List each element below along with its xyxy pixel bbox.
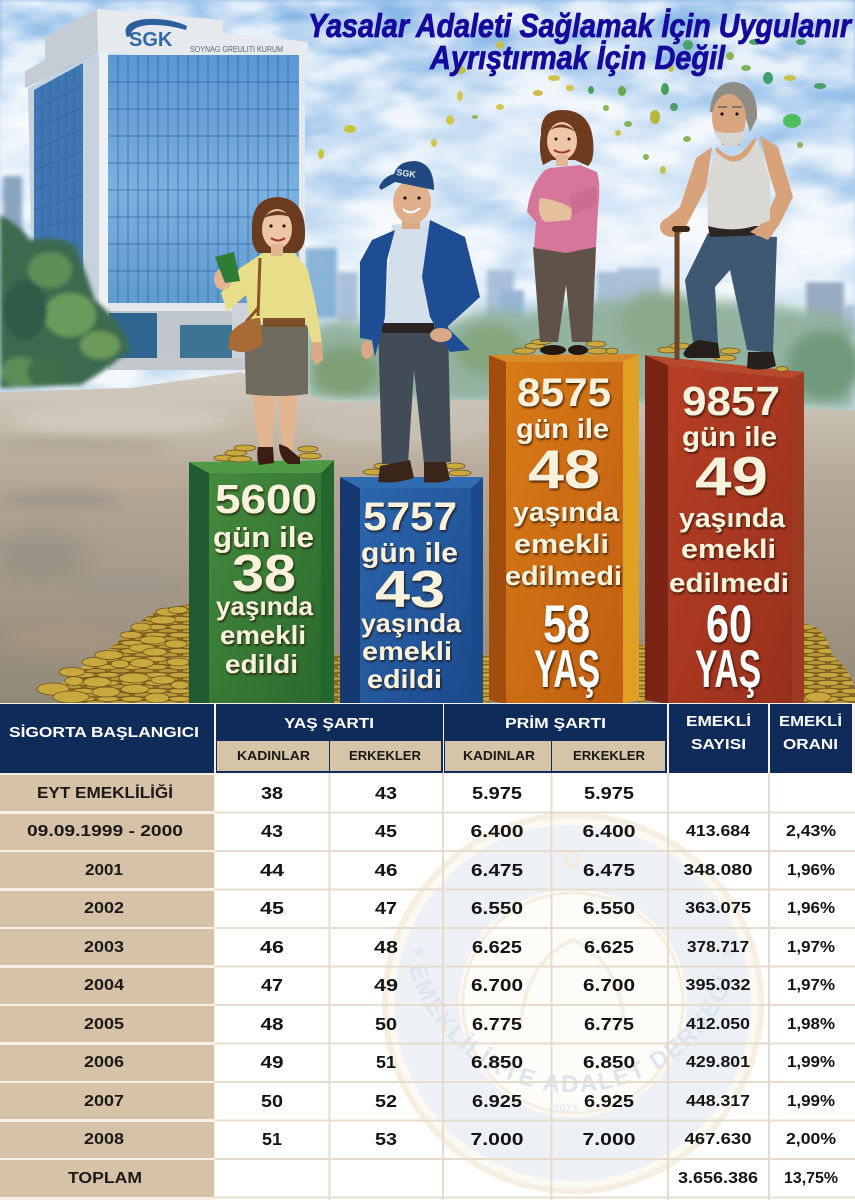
sub-headers: kadınlar and erkekler: ERKEKLER bbox=[573, 749, 645, 763]
table row: 2006: 2006 bbox=[84, 1054, 124, 1071]
figure: woman in yellow blouse bbox=[214, 197, 323, 465]
watermark: association logo: D bbox=[563, 844, 582, 874]
pedestal text: 5757 bbox=[361, 495, 462, 694]
header: emekli sayısı: EMEKLİ bbox=[686, 713, 751, 730]
pedestal text: 5600: yaşında bbox=[216, 591, 314, 621]
table row: 2001: 46 bbox=[374, 860, 398, 880]
table row: 2003: 48 bbox=[374, 937, 398, 957]
table row: 2002: 363.075 bbox=[685, 900, 751, 917]
table row: 2003: 2003 bbox=[84, 939, 124, 956]
table row: 2003: 6.625 bbox=[472, 937, 522, 957]
table row: 2001: 2001 bbox=[85, 862, 123, 879]
table row: 2000: 6.400 bbox=[582, 821, 636, 841]
table row: 2003: 1,97% bbox=[787, 939, 835, 956]
table row: 2000 bbox=[27, 821, 836, 841]
pedestal text: 8575: emekli bbox=[514, 529, 609, 559]
table row: 2007: 50 bbox=[261, 1091, 283, 1111]
pedestal text: 5757: yaşında bbox=[361, 608, 462, 638]
coins on blue pedestal bbox=[363, 463, 471, 476]
table row: 2003: 6.625 bbox=[584, 937, 634, 957]
pedestal text: 5757: 5757 bbox=[363, 495, 457, 539]
table row: 2001: 6.475 bbox=[471, 860, 523, 880]
panel: orange pedestal 8575 days bbox=[489, 340, 639, 704]
header: emekli oranı: EMEKLİ bbox=[779, 713, 842, 730]
table row: 2004: 49 bbox=[374, 975, 398, 995]
table row: 2001: 348.080 bbox=[684, 862, 752, 879]
table first column background bbox=[0, 775, 214, 1197]
table row: 2002 bbox=[84, 898, 835, 918]
table row: 2007: 52 bbox=[375, 1091, 397, 1111]
figure: man in blue jacket and SGK cap bbox=[360, 161, 480, 483]
table row: 2000: 413.684 bbox=[686, 823, 750, 840]
pedestal text: 8575: yaşında bbox=[513, 497, 620, 527]
walking cane bbox=[674, 232, 680, 360]
table row: 2000: 09.09.1999 - 2000 bbox=[27, 823, 183, 840]
panel: green pedestal 5600 days bbox=[189, 445, 334, 704]
table row: 2004 bbox=[84, 975, 835, 995]
coins on red pedestal bbox=[658, 343, 788, 372]
table row: 2006: 1,99% bbox=[787, 1054, 835, 1071]
header: emekli sayısı bbox=[686, 713, 751, 753]
table row: 2007: 1,99% bbox=[787, 1093, 835, 1110]
table row: EYT: EYT EMEKLİLİĞİ bbox=[37, 784, 173, 802]
table row: total: 13,75% bbox=[784, 1170, 838, 1187]
watermark: association logo: ★ bbox=[718, 941, 736, 963]
pedestal text: 9857: 60 bbox=[706, 595, 752, 654]
pedestal text: 8575: 8575 bbox=[517, 371, 611, 415]
table row: 2006: 49 bbox=[260, 1052, 284, 1072]
pedestal text: 9857: 9857 bbox=[682, 378, 780, 424]
pedestal text: 5757: emekli bbox=[362, 636, 452, 666]
table row: EYT: 5.975 bbox=[472, 783, 522, 803]
table row: 2005: 2005 bbox=[84, 1016, 124, 1033]
illustration scene background bbox=[0, 0, 855, 704]
table row: 2002: 6.550 bbox=[583, 898, 635, 918]
watermark: association logo: EMEKLİLİKTE ADALET DERNEĞİ bbox=[410, 964, 732, 1092]
pedestal text: 5600: 5600 bbox=[215, 476, 317, 522]
figure: man in blue jacket and SGK cap: SGK bbox=[396, 167, 417, 180]
pedestal text: 8575: gün ile bbox=[516, 413, 609, 444]
table row: 2008 bbox=[84, 1129, 836, 1149]
pedestal text: 9857 bbox=[669, 378, 789, 699]
pedestal text: 5600 bbox=[213, 476, 317, 679]
pedestal text: 8575: edilmedi bbox=[505, 561, 622, 591]
pedestal text: 8575: YAŞ bbox=[534, 640, 600, 699]
pedestal text: 9857: YAŞ bbox=[695, 640, 761, 699]
panel: blue pedestal 5757 days bbox=[340, 463, 483, 704]
table row: 2008: 2,00% bbox=[786, 1131, 836, 1148]
table row: 2008: 7.000 bbox=[470, 1129, 524, 1149]
table row: total bbox=[68, 1170, 838, 1187]
table row: EYT: 43 bbox=[375, 783, 397, 803]
SGK logo: SGK bbox=[129, 29, 173, 51]
table row: 2003 bbox=[84, 937, 835, 957]
table row: 2008: 2008 bbox=[84, 1131, 124, 1148]
falling green leaves bbox=[318, 39, 826, 174]
pedestal text: 9857: edilmedi bbox=[669, 568, 789, 598]
table background bbox=[0, 703, 855, 1200]
coins on green pedestal bbox=[214, 445, 321, 462]
table row: 2007: 448.317 bbox=[686, 1093, 750, 1110]
table row: EYT: 5.975 bbox=[584, 783, 634, 803]
pedestal text: 8575: 58 bbox=[543, 595, 590, 654]
table row: 2002: 2002 bbox=[84, 900, 124, 917]
table row: 2008: 51 bbox=[262, 1129, 282, 1149]
building: SGK headquarters bbox=[25, 9, 308, 370]
gold coin piles on the ground bbox=[37, 604, 855, 704]
pedestal text: 5757: edildi bbox=[367, 664, 442, 694]
watermark: association logo bbox=[382, 814, 764, 1194]
header: sigorta başlangıcı: SİGORTA BAŞLANGICI bbox=[9, 724, 199, 741]
table row: 2002: 1,96% bbox=[787, 900, 835, 917]
pedestal text: 9857: gün ile bbox=[682, 421, 777, 452]
table row: 2007 bbox=[84, 1091, 835, 1111]
table row: 2004: 6.700 bbox=[583, 975, 635, 995]
table row: 2002: 6.550 bbox=[471, 898, 523, 918]
table row: 2004: 2004 bbox=[84, 977, 124, 994]
watermark: association logo: 2023 bbox=[553, 1103, 577, 1115]
pedestal text: 5600: 38 bbox=[232, 545, 296, 603]
figure: old man in tank top with cane bbox=[660, 82, 793, 370]
header: emekli oranı bbox=[779, 713, 842, 753]
table row: 2001: 6.475 bbox=[583, 860, 635, 880]
panel: red pedestal 9857 days bbox=[645, 343, 804, 704]
table row: EYT: 38 bbox=[261, 783, 283, 803]
table row: 2005 bbox=[84, 1014, 835, 1034]
left trees bbox=[0, 215, 130, 388]
table row: total: 3.656.386 bbox=[678, 1170, 758, 1187]
table row: 2008: 7.000 bbox=[582, 1129, 636, 1149]
table row: 2001: 1,96% bbox=[787, 862, 835, 879]
pedestal text: 9857: yaşında bbox=[679, 503, 786, 533]
table row: 2001: 44 bbox=[260, 860, 284, 880]
table row: 2004: 395.032 bbox=[686, 977, 750, 994]
table row: 2005: 412.050 bbox=[686, 1016, 750, 1033]
table row: 2005: 6.775 bbox=[584, 1014, 634, 1034]
table row: 2006: 6.850 bbox=[471, 1052, 523, 1072]
sub-headers: kadınlar and erkekler: KADINLAR bbox=[237, 749, 310, 763]
table row: 2005: 6.775 bbox=[472, 1014, 522, 1034]
table row: 2005: 1,98% bbox=[787, 1016, 835, 1033]
pedestal text: 5757: 43 bbox=[375, 561, 445, 619]
coins on orange pedestal bbox=[513, 340, 618, 354]
pedestal text: 5600: gün ile bbox=[213, 522, 314, 554]
pedestal text: 5600: edildi bbox=[225, 649, 298, 679]
distant tree line bbox=[305, 290, 855, 410]
table row: 2005: 50 bbox=[375, 1014, 397, 1034]
distant city skyline bbox=[3, 176, 855, 335]
header: emekli sayısı: SAYISI bbox=[691, 736, 746, 753]
green card in hand bbox=[215, 252, 240, 283]
sub-headers: kadınlar and erkekler: ERKEKLER bbox=[349, 749, 421, 763]
table row: EYT bbox=[37, 783, 634, 803]
pedestal text: 8575: 48 bbox=[528, 438, 600, 500]
pedestal text: 9857: 49 bbox=[695, 445, 768, 507]
table row: 2000: 6.400 bbox=[470, 821, 524, 841]
figure: woman in pink blouse standing arms crossed bbox=[527, 110, 599, 355]
title: Ayrıştırmak İçin Değil bbox=[429, 39, 726, 76]
table row: 2007: 2007 bbox=[84, 1093, 124, 1110]
table row: 2006: 429.801 bbox=[686, 1054, 750, 1071]
table row: 2000: 2,43% bbox=[786, 823, 836, 840]
table row: 2002: 47 bbox=[375, 898, 397, 918]
sub-headers: kadınlar and erkekler bbox=[217, 741, 665, 771]
table row: 2007: 6.925 bbox=[472, 1091, 522, 1111]
table row: 2006: 6.850 bbox=[583, 1052, 635, 1072]
watermark: association logo: ★ bbox=[410, 941, 428, 963]
table header bbox=[0, 704, 852, 773]
ground bbox=[0, 372, 855, 704]
header: emekli oranı: ORANI bbox=[783, 736, 838, 753]
header: yaş şartı: YAŞ ŞARTI bbox=[284, 715, 374, 732]
table row: 2006 bbox=[84, 1052, 835, 1072]
table row: 2008: 53 bbox=[375, 1129, 397, 1149]
table row: 2004: 47 bbox=[261, 975, 283, 995]
building sign text: SOYNAG GREULITI KURUM bbox=[190, 45, 283, 54]
sub-headers: kadınlar and erkekler: KADINLAR bbox=[463, 749, 535, 763]
pedestal text: 5600: emekli bbox=[220, 620, 306, 650]
table row: 2003: 46 bbox=[260, 937, 284, 957]
pedestal text: 9857: emekli bbox=[681, 534, 776, 564]
table row: 2002: 45 bbox=[260, 898, 284, 918]
table row: 2005: 48 bbox=[260, 1014, 284, 1034]
title bbox=[308, 7, 853, 76]
table row: 2004: 1,97% bbox=[787, 977, 835, 994]
pedestal text: 8575 bbox=[505, 371, 622, 699]
table row: 2008: 467.630 bbox=[684, 1131, 752, 1148]
table row: 2000: 45 bbox=[375, 821, 397, 841]
table row: 2006: 51 bbox=[376, 1052, 396, 1072]
table row: 2001 bbox=[85, 860, 835, 880]
SGK logo bbox=[126, 19, 187, 51]
pedestal text: 5757: gün ile bbox=[361, 537, 458, 568]
table row: 2000: 43 bbox=[261, 821, 283, 841]
table row: total: TOPLAM bbox=[68, 1170, 142, 1187]
table row: 2007: 6.925 bbox=[584, 1091, 634, 1111]
table row: 2003: 378.717 bbox=[687, 939, 749, 956]
table row: 2004: 6.700 bbox=[471, 975, 523, 995]
header: prim şartı: PRİM ŞARTI bbox=[505, 715, 606, 732]
